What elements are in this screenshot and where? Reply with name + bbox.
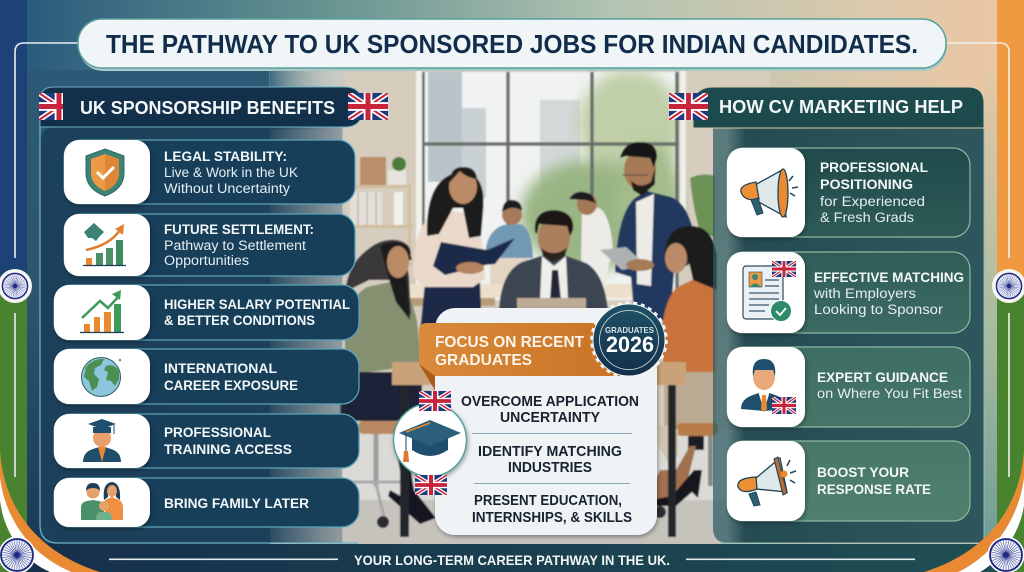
service card: boost response rate	[727, 441, 970, 521]
seated woman left	[340, 240, 422, 421]
left panel	[40, 70, 359, 543]
graduates 2026 badge	[592, 303, 666, 377]
service card: effective matching: EFFECTIVE MATCHING	[814, 270, 964, 285]
service card: expert guidance	[727, 347, 970, 427]
icon: flag right of heading	[348, 93, 388, 120]
icon: flag right heading	[669, 93, 708, 120]
service card: professional positioning: PROFESSIONAL	[820, 160, 928, 175]
list of focus points: UNCERTAINTY	[500, 409, 600, 426]
footer bar	[27, 544, 997, 572]
icon: flag above cap	[419, 391, 451, 411]
standing man right	[600, 142, 698, 323]
icon: salary chart	[80, 290, 124, 332]
icon: chakra right bottom	[987, 536, 1024, 572]
centre card: focus on recent graduates	[419, 303, 666, 535]
service card: effective matching: with Employers	[813, 286, 916, 301]
orange banner	[419, 323, 620, 390]
chair right and trousers	[650, 370, 718, 518]
benefit card: legal stability	[64, 140, 355, 204]
list of focus points: OVERCOME APPLICATION	[461, 393, 639, 410]
benefit card: future settlement: Pathway to Settlement	[164, 238, 306, 253]
seated man centre	[499, 210, 608, 310]
plant right	[690, 174, 715, 238]
left tricolour border	[0, 0, 100, 572]
heading text: UK SPONSORSHIP BENEFITS	[80, 98, 335, 118]
list of focus points: IDENTIFY MATCHING	[478, 443, 622, 460]
list of focus points: PRESENT EDUCATION,	[474, 492, 622, 509]
icon: megaphone orange	[738, 457, 796, 506]
service card: professional positioning	[727, 148, 970, 237]
service card: effective matching: Looking to Sponsor	[814, 302, 944, 317]
icon: CV document	[743, 261, 796, 322]
right panel heading	[693, 87, 984, 128]
window	[416, 70, 686, 300]
icon: graduation cap medallion	[394, 404, 466, 476]
background person blue	[485, 200, 533, 284]
benefit card: higher salary: & BETTER CONDITIONS	[164, 313, 315, 328]
benefit card: future settlement	[64, 214, 355, 276]
benefit card: international exposure: CAREER EXPOSURE	[164, 378, 298, 393]
service card: boost response rate: BOOST YOUR	[817, 465, 909, 480]
icon: globe	[82, 358, 121, 396]
seated woman right	[662, 226, 717, 372]
icon: family	[81, 482, 123, 520]
table	[392, 362, 686, 537]
benefit card: future settlement: Opportunities	[164, 253, 249, 268]
icon: chakra left bottom	[0, 536, 36, 572]
service card: professional positioning: for Experienced	[820, 194, 925, 209]
back desk	[400, 284, 640, 298]
service card: professional positioning: & Fresh Grads	[820, 210, 914, 225]
chair left	[350, 421, 410, 528]
right panel	[713, 128, 984, 543]
benefit card: bring family	[54, 478, 359, 527]
orange banner: FOCUS ON RECENT	[435, 334, 584, 351]
background person white shirt	[569, 192, 613, 288]
left panel heading	[40, 87, 363, 127]
icon: chakra right middle	[992, 269, 1024, 303]
benefit card: professional training: TRAINING ACCESS	[164, 442, 292, 457]
graduates 2026 badge: 2026	[606, 332, 654, 357]
legs left	[388, 440, 436, 524]
icon: flag below cap	[415, 475, 447, 495]
title text: THE PATHWAY TO UK SPONSORED JOBS FOR INDIAN CANDIDATES.	[106, 29, 918, 59]
footer tagline: YOUR LONG-TERM CAREER PATHWAY IN THE UK.	[354, 552, 670, 568]
shelf	[350, 157, 413, 265]
benefit card: professional training: PROFESSIONAL	[164, 425, 271, 440]
icon: rising chart with house	[83, 223, 126, 266]
list of focus points	[461, 393, 639, 526]
benefit card: legal stability: Live & Work in the UK	[164, 165, 298, 180]
benefit card: higher salary: HIGHER SALARY POTENTIAL	[164, 297, 350, 312]
benefit card: higher salary	[54, 285, 359, 340]
title banner	[78, 19, 947, 71]
icon: flag left heading	[39, 93, 63, 120]
benefit card: professional training	[54, 414, 359, 468]
service card: expert guidance: EXPERT GUIDANCE	[817, 370, 948, 385]
list of focus points: INTERNSHIPS, & SKILLS	[472, 509, 632, 526]
icon: megaphone	[741, 169, 798, 217]
benefit card: international exposure	[54, 349, 359, 404]
benefit card: bring family: BRING FAMILY LATER	[164, 496, 309, 511]
photo: office team scene	[270, 70, 770, 545]
benefit card: future settlement: FUTURE SETTLEMENT:	[164, 222, 314, 237]
icon: graduate	[83, 419, 121, 462]
icon: chakra left middle	[0, 269, 32, 303]
icon: expert adviser	[741, 359, 796, 414]
graduates 2026 badge: GRADUATES	[605, 325, 654, 335]
right tricolour border	[924, 0, 1024, 572]
standing woman	[413, 167, 515, 332]
orange banner: GRADUATES	[435, 352, 532, 369]
service card: effective matching	[727, 252, 970, 333]
icon: shield	[86, 149, 124, 196]
benefit card: legal stability: LEGAL STABILITY:	[164, 149, 287, 164]
benefit card: legal stability: Without Uncertainty	[164, 181, 290, 196]
service card: professional positioning: POSITIONING	[820, 177, 913, 192]
benefit card: international exposure: INTERNATIONAL	[164, 361, 277, 376]
heading text: HOW CV MARKETING HELP	[719, 97, 963, 117]
service card: boost response rate: RESPONSE RATE	[817, 482, 931, 497]
list of focus points: INDUSTRIES	[508, 459, 592, 476]
service card: expert guidance: on Where You Fit Best	[817, 386, 962, 401]
